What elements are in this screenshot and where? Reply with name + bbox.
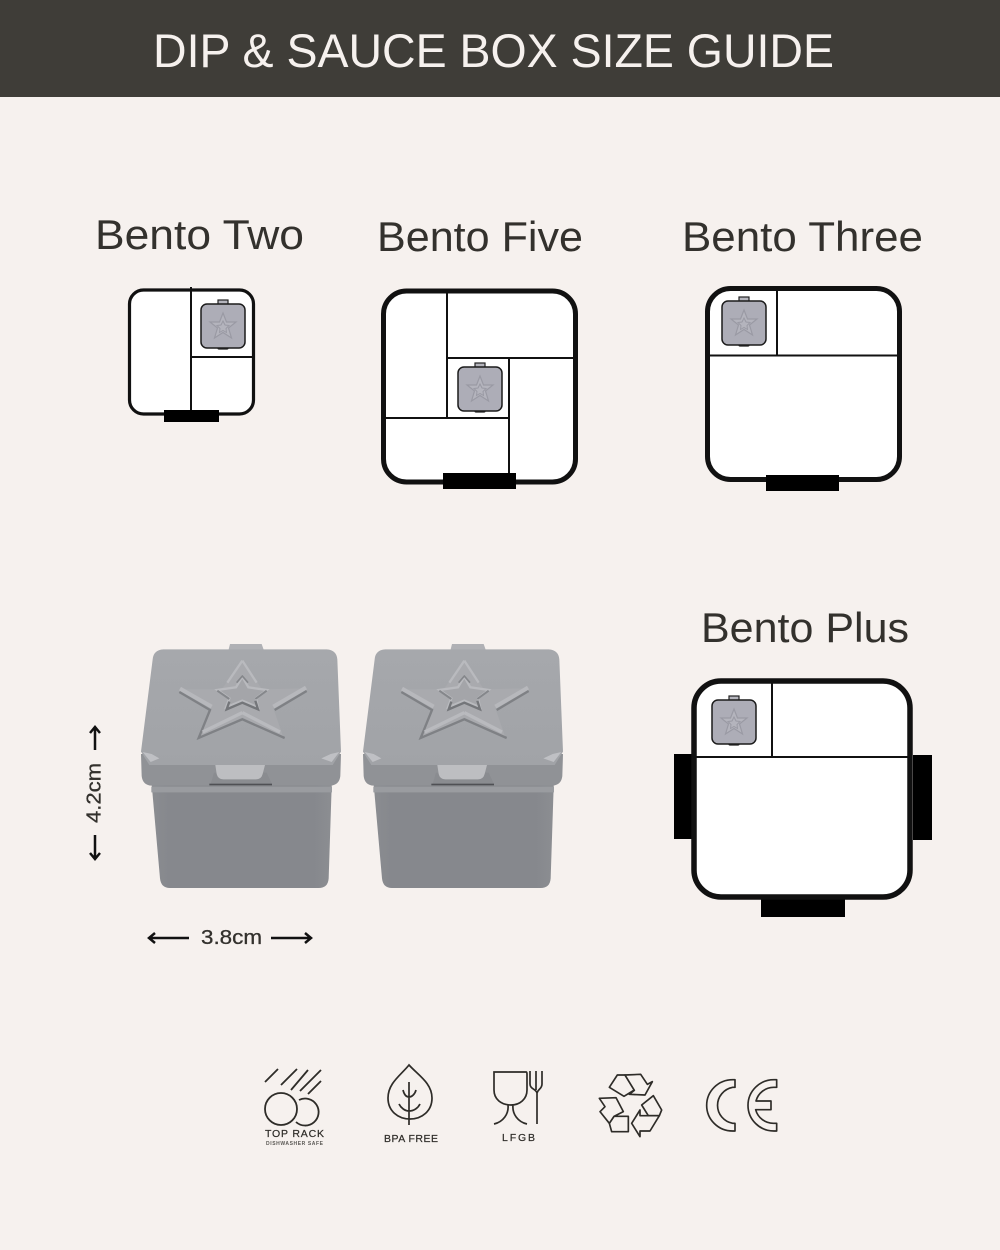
heading: Bento Three: Bento Three [682, 213, 923, 260]
icon: LFGB glass and fork [494, 1071, 542, 1144]
diagram: Bento Two layout [130, 287, 255, 422]
panel: Bento Plus [674, 604, 932, 917]
diagram: Bento Five layout [384, 291, 576, 489]
label: BPA FREE: BPA FREE [384, 1133, 438, 1145]
panel: Bento Five [377, 213, 583, 489]
label: LFGB: LFGB [502, 1132, 535, 1144]
header band with title [0, 0, 1000, 97]
heading: Bento Two: Bento Two [95, 211, 304, 258]
icon: BPA free leaf [384, 1065, 438, 1145]
arrow: right [271, 933, 311, 943]
dimension: height 4.2cm [84, 727, 106, 859]
right star box [363, 644, 563, 888]
label: DISHWASHER SAFE: DISHWASHER SAFE [266, 1141, 324, 1147]
icon: CE mark [707, 1080, 777, 1131]
heading: Bento Plus: Bento Plus [701, 604, 909, 651]
label: 3.8cm: 3.8cm [201, 927, 262, 949]
left star box [141, 644, 341, 888]
panel: Bento Three [682, 213, 923, 491]
header band with title: DIP & SAUCE BOX SIZE GUIDE [153, 24, 834, 77]
icon: recycling arrows [599, 1074, 662, 1137]
icon: top rack dishwasher safe [265, 1069, 324, 1147]
label: 4.2cm: 4.2cm [84, 763, 106, 823]
arrow: up [90, 727, 100, 750]
diagram: Bento Plus layout [674, 680, 932, 917]
arrow: left [149, 933, 189, 943]
heading: Bento Five: Bento Five [377, 213, 583, 260]
arrow: down [90, 835, 100, 859]
panel: Bento Two [95, 211, 304, 422]
diagram: Bento Three layout [707, 288, 900, 491]
dimension: width 3.8cm [149, 927, 311, 949]
product: dip and sauce boxes [141, 644, 563, 888]
label: TOP RACK: TOP RACK [265, 1128, 324, 1140]
